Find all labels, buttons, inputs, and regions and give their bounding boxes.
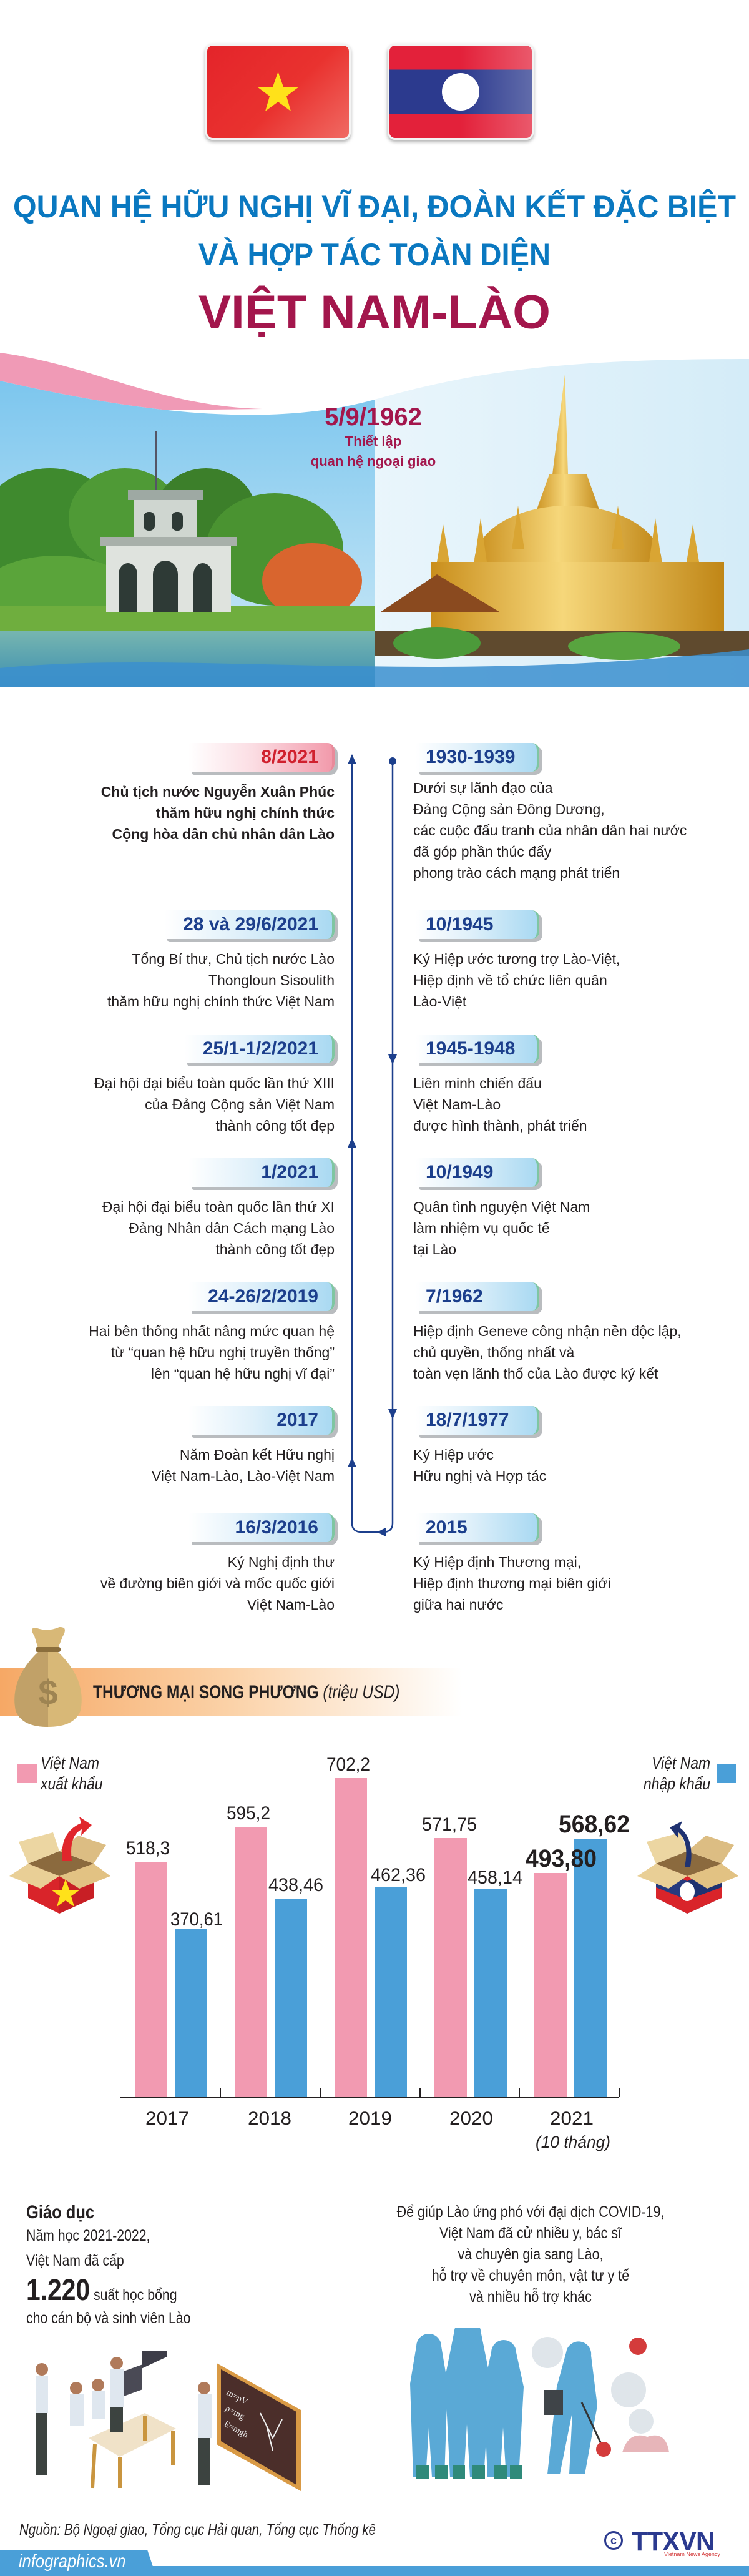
timeline right: 10/1945 — [413, 910, 620, 1010]
timeline right: 1930-1939: đã góp phần thúc đẩy — [413, 843, 551, 860]
timeline right: 10/1945: Lào-Việt — [413, 993, 466, 1010]
illustration: classroom — [36, 2351, 301, 2491]
illustration: classroom: p=mg — [223, 2404, 246, 2422]
timeline left: 2017: Năm Đoàn kết Hữu nghị — [180, 1447, 335, 1463]
COVID support text: hỗ trợ về chuyên môn, vật tư y tế — [432, 2267, 629, 2284]
timeline right: 7/1962 — [413, 1282, 682, 1382]
bar chart: 568,62 — [559, 1811, 630, 1838]
timeline left: 8/2021: Cộng hòa dân chủ nhân dân Lào — [112, 826, 335, 842]
trees left — [0, 468, 374, 687]
turtle tower — [100, 431, 237, 612]
timeline right: 2015: Hiệp định thương mại biên giới — [413, 1575, 611, 1591]
logo: TTXVN — [604, 2526, 720, 2557]
icon: import box (Laos) — [637, 1821, 738, 1914]
timeline right: 2015: Ký Hiệp định Thương mại, — [413, 1554, 581, 1570]
timeline left: 25/1-1/2/2021: của Đảng Cộng sản Việt Nam — [145, 1096, 335, 1113]
timeline left: 24-26/2/2019: Hai bên thống nhất nâng mức quan hệ — [89, 1323, 335, 1339]
bar chart: (10 tháng) — [536, 2133, 610, 2151]
timeline left: 8/2021: Chủ tịch nước Nguyễn Xuân Phúc — [101, 784, 335, 800]
legend: import — [644, 1754, 736, 1793]
COVID support text: Việt Nam đã cử nhiều y, bác sĩ — [439, 2225, 622, 2242]
timeline left: 8/2021: thăm hữu nghị chính thức — [156, 805, 335, 821]
timeline right: 2015: 2015 — [426, 1517, 468, 1538]
timeline left: 16/3/2016 — [100, 1513, 338, 1613]
timeline right: 1930-1939 — [413, 743, 687, 881]
timeline left: 28 và 29/6/2021: Thongloun Sisoulith — [208, 972, 335, 988]
legend: export — [17, 1754, 103, 1793]
bar chart: 493,80 — [526, 1845, 597, 1872]
timeline left: 24-26/2/2019: 24-26/2/2019 — [208, 1286, 318, 1307]
illustration: classroom: m=pV — [225, 2388, 249, 2407]
timeline left: 24-26/2/2019: lên “quan hệ hữu nghị vĩ đại” — [151, 1365, 335, 1382]
timeline left: 16/3/2016: về đường biên giới và mốc quốc giới — [100, 1575, 335, 1591]
COVID support text — [397, 2203, 664, 2306]
timeline right: 2015: giữa hai nước — [413, 1596, 503, 1613]
legend: export: Việt Nam — [41, 1754, 99, 1772]
timeline left: 1/2021: thành công tốt đẹp — [215, 1241, 335, 1257]
footer bar — [0, 2550, 749, 2576]
COVID support text: và chuyên gia sang Lào, — [458, 2246, 604, 2263]
timeline left: 16/3/2016: Việt Nam-Lào — [247, 1596, 335, 1613]
timeline left: 8/2021: 8/2021 — [261, 747, 318, 767]
logo: TTXVN: Vietnam News Agency — [664, 2551, 720, 2557]
timeline left: 24-26/2/2019: từ “quan hệ hữu nghị truyền thống” — [111, 1344, 335, 1360]
bar chart: 2019 — [348, 2108, 392, 2129]
timeline right: 1930-1939: các cuộc đấu tranh của nhân dân hai nước — [413, 822, 687, 838]
timeline right: 10/1949: Quân tình nguyện Việt Nam — [413, 1199, 590, 1215]
timeline right: 18/7/1977: Hữu nghị và Hợp tác — [413, 1468, 546, 1484]
legend: export: xuất khẩu — [41, 1774, 103, 1793]
timeline right: 1945-1948: Liên minh chiến đấu — [413, 1075, 542, 1091]
COVID support text: Để giúp Lào ứng phó với đại dịch COVID-19, — [397, 2203, 664, 2221]
timeline left: 8/2021 — [101, 743, 338, 842]
timeline left: 28 và 29/6/2021: thăm hữu nghị chính thức Việt Nam — [107, 993, 335, 1010]
icon: money bag — [14, 1627, 82, 1727]
timeline right: 1945-1948: 1945-1948 — [426, 1038, 515, 1059]
timeline right: 1945-1948 — [413, 1035, 587, 1134]
logo: TTXVN: c — [610, 2534, 617, 2547]
date callout: quan hệ ngoại giao — [311, 453, 436, 469]
title: QUAN HỆ HỮU NGHỊ VĨ ĐẠI, ĐOÀN KẾT ĐẶC BIỆT — [13, 189, 736, 224]
timeline right: 10/1945: Ký Hiệp ước tương trợ Lào-Việt, — [413, 951, 620, 967]
timeline left: 24-26/2/2019 — [89, 1282, 338, 1382]
bar chart: 458,14 — [468, 1867, 522, 1888]
timeline right: 2015 — [413, 1513, 611, 1613]
education text — [26, 2202, 190, 2327]
illustration: classroom: E=mgh — [222, 2419, 250, 2440]
legend: import: nhập khẩu — [644, 1774, 710, 1793]
legend: import: Việt Nam — [652, 1754, 710, 1772]
timeline right: 10/1945: 10/1945 — [426, 914, 493, 935]
bar chart: 2021 — [550, 2108, 594, 2129]
timeline right: 1945-1948: được hình thành, phát triển — [413, 1118, 587, 1134]
bar chart: 571,75 — [422, 1814, 477, 1835]
timeline right: 7/1962: chủ quyền, thống nhất và — [413, 1344, 574, 1360]
timeline right: 18/7/1977 — [413, 1406, 546, 1484]
trade section header — [0, 1627, 441, 1727]
timeline left: 28 và 29/6/2021 — [107, 910, 338, 1010]
flag: Laos — [388, 44, 534, 140]
logo: TTXVN: TTXVN — [632, 2526, 714, 2557]
timeline right: 1930-1939: 1930-1939 — [426, 747, 515, 767]
education text: Giáo dục — [26, 2202, 94, 2223]
bar chart: 702,2 — [326, 1754, 370, 1775]
timeline right: 7/1962: 7/1962 — [426, 1286, 483, 1307]
timeline right: 10/1945: Hiệp định về tổ chức liên quân — [413, 972, 607, 988]
icon: money bag: $ — [38, 1673, 58, 1712]
title: VÀ HỢP TÁC TOÀN DIỆN — [198, 237, 551, 272]
trade title: THƯƠNG MẠI SONG PHƯƠNG (triệu USD) — [93, 1682, 399, 1703]
bar chart: 462,36 — [371, 1865, 426, 1885]
footer bar: infographics.vn — [19, 2551, 126, 2572]
timeline right: 1930-1939: phong trào cách mạng phát triển — [413, 865, 620, 881]
hero photos: Hanoi and That Luang — [0, 353, 749, 687]
bar chart: 438,46 — [268, 1875, 323, 1895]
date callout: Thiết lập — [345, 433, 401, 449]
timeline right: 18/7/1977: Ký Hiệp ước — [413, 1447, 494, 1463]
title — [13, 189, 736, 337]
timeline right: 10/1949: làm nhiệm vụ quốc tế — [413, 1220, 550, 1236]
timeline right: 10/1949: 10/1949 — [426, 1162, 493, 1182]
bar chart: 2017 — [145, 2108, 189, 2129]
bar chart: 2018 — [248, 2108, 291, 2129]
timeline left: 16/3/2016: Ký Nghị định thư — [228, 1554, 335, 1570]
timeline right: 18/7/1977: 18/7/1977 — [426, 1410, 509, 1430]
golden stupa — [374, 375, 749, 660]
timeline right: 1945-1948: Việt Nam-Lào — [413, 1096, 501, 1113]
education text: cho cán bộ và sinh viên Lào — [26, 2309, 190, 2327]
COVID support text: và nhiều hỗ trợ khác — [469, 2288, 592, 2306]
source: Nguồn: Bộ Ngoại giao, Tổng cục Hải quan, Tổng cục Thống kê — [19, 2521, 376, 2539]
timeline left: 1/2021 — [102, 1158, 338, 1257]
flag: Vietnam — [205, 44, 351, 140]
timeline right: 1930-1939: Đảng Cộng sản Đông Dương, — [413, 801, 605, 817]
bar chart: 370,61 — [170, 1909, 223, 1930]
timeline left: 25/1-1/2/2021 — [94, 1035, 338, 1134]
timeline right: 7/1962: Hiệp định Geneve công nhận nền độc lập, — [413, 1323, 682, 1339]
timeline left: 2017: 2017 — [277, 1410, 318, 1430]
bar chart — [120, 1754, 630, 2151]
education text: 1.220 suất học bổng — [26, 2274, 177, 2307]
timeline right: 7/1962: toàn vẹn lãnh thổ của Lào được ký kết — [413, 1365, 658, 1382]
timeline left: 2017 — [152, 1406, 338, 1484]
education text: Việt Nam đã cấp — [26, 2252, 124, 2269]
icon: export box (Vietnam) — [9, 1817, 110, 1914]
timeline left: 28 và 29/6/2021: 28 và 29/6/2021 — [183, 914, 318, 935]
date callout — [311, 403, 436, 469]
timeline left: 25/1-1/2/2021: Đại hội đại biểu toàn quốc lần thứ XIII — [94, 1075, 335, 1091]
timeline arrows — [348, 754, 397, 1536]
timeline left: 1/2021: Đại hội đại biểu toàn quốc lần thứ XI — [102, 1199, 335, 1215]
timeline left: 1/2021: Đảng Nhân dân Cách mạng Lào — [129, 1220, 335, 1236]
bar chart: 595,2 — [227, 1803, 270, 1824]
bar chart: 2020 — [449, 2108, 493, 2129]
date callout: 5/9/1962 — [325, 403, 422, 431]
timeline left: 25/1-1/2/2021: 25/1-1/2/2021 — [203, 1038, 318, 1059]
education text: Năm học 2021-2022, — [26, 2227, 150, 2244]
bar chart: 518,3 — [126, 1838, 170, 1859]
timeline left: 25/1-1/2/2021: thành công tốt đẹp — [215, 1118, 335, 1134]
illustration: medical team — [410, 2328, 669, 2479]
timeline left: 16/3/2016: 16/3/2016 — [235, 1517, 318, 1538]
timeline left: 2017: Việt Nam-Lào, Lào-Việt Nam — [152, 1468, 335, 1484]
timeline right: 10/1949 — [413, 1158, 590, 1257]
timeline right: 10/1949: tại Lào — [413, 1241, 456, 1257]
timeline left: 1/2021: 1/2021 — [261, 1162, 318, 1182]
timeline left: 28 và 29/6/2021: Tổng Bí thư, Chủ tịch nước Lào — [132, 951, 335, 967]
timeline right: 1930-1939: Dưới sự lãnh đạo của — [413, 780, 553, 796]
